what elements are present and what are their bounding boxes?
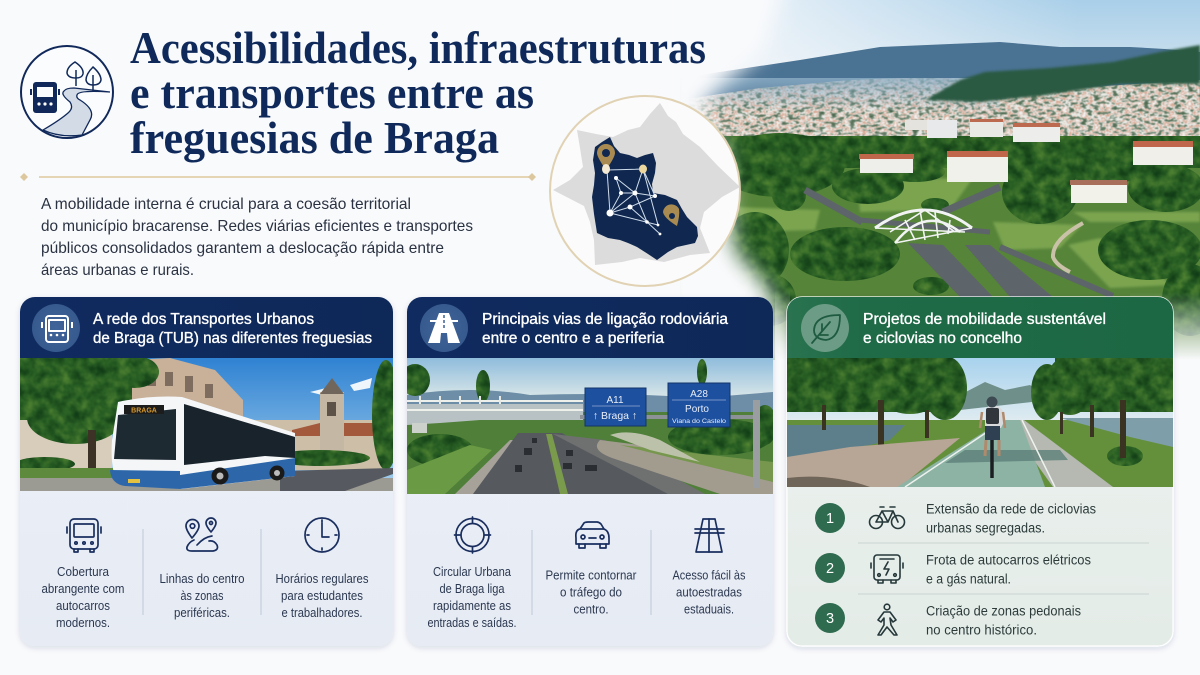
column text 2: o tráfego do [560, 586, 622, 600]
column text 2: Linhas do centro [160, 572, 245, 586]
column text 2: às zonas [180, 589, 224, 603]
hero photo: aerial view of Braga [660, 0, 1200, 370]
column text 1: Circular Urbana [433, 565, 511, 579]
bus in logo [30, 82, 60, 113]
separators [143, 529, 261, 615]
road sign A11: ↑ Braga ↑ [593, 410, 637, 422]
item 3: no centro histórico. [926, 622, 1037, 638]
title: freguesias de Braga [130, 113, 499, 163]
card heading [93, 311, 372, 347]
column text 3: estaduais. [684, 602, 734, 616]
card heading: e ciclovias no concelho [863, 330, 1022, 347]
column text 2 [546, 568, 636, 616]
photo: motorway and signs [400, 358, 777, 494]
column text 1 [42, 565, 124, 630]
lawn patches [737, 178, 1200, 288]
column text 3 [672, 568, 746, 616]
photo: bus in front of historic buildings [15, 356, 400, 491]
item 2: Frota de autocarros elétricos [926, 552, 1091, 568]
column text 2: Permite contornar [546, 568, 636, 582]
item 1 [815, 502, 1096, 536]
item 2 [815, 552, 1091, 586]
intro text: do município bracarense. Redes viárias eficientes e transportes [41, 218, 473, 235]
title [130, 23, 706, 163]
item 1: urbanas segregadas. [926, 520, 1045, 536]
card: TUB network [15, 297, 400, 646]
card: sustainable mobility [787, 297, 1180, 646]
road sign A28: Viana do Castelo [672, 418, 726, 425]
card heading: de Braga (TUB) nas diferentes freguesias [93, 330, 372, 347]
bus [110, 397, 295, 489]
gantry [580, 415, 755, 419]
item 2: 2 [826, 561, 834, 577]
column text 2: periféricas. [174, 606, 230, 620]
item 1: 1 [826, 511, 834, 527]
road sign A28: A28 [690, 389, 708, 400]
item 1: Extensão da rede de ciclovias [926, 502, 1096, 516]
column text 3: para estudantes [281, 589, 363, 603]
lawn base [680, 138, 1200, 360]
column text 1: modernos. [56, 616, 110, 630]
road sign A11: A11 [606, 395, 624, 406]
column text 1: abrangente com [42, 582, 124, 596]
card header [407, 297, 773, 358]
column text 2: centro. [574, 602, 608, 616]
icon: electric bus [871, 555, 903, 583]
hero buildings [859, 119, 1193, 203]
separators [532, 530, 651, 615]
intro text [41, 196, 473, 279]
intro text: A mobilidade interna é crucial para a coesão territorial [41, 196, 411, 213]
column text 1 [428, 565, 516, 630]
column text 2 [160, 572, 245, 620]
column text 1: Cobertura [57, 565, 109, 579]
trees in logo [67, 62, 101, 92]
column text 1: de Braga liga [440, 582, 505, 596]
column text 3 [276, 572, 368, 620]
main carriageways [908, 243, 1053, 297]
road sign A28: Porto [685, 404, 709, 415]
icon: bicycle [870, 507, 904, 528]
intro text: públicos consolidados garantem a deslocação rápida entre [41, 240, 444, 257]
cyclist [980, 396, 1005, 478]
white fades over hero [660, 0, 790, 370]
item 3 [815, 603, 1081, 638]
road sign A11 [585, 388, 646, 426]
gold divider [20, 173, 536, 181]
icon: pedestrian [878, 604, 897, 635]
roads [805, 187, 1113, 296]
title: e transportes entre as [130, 68, 534, 118]
header icon: highway [420, 304, 468, 352]
icon: roundabout [454, 517, 490, 553]
column text 1: autocarros [56, 599, 110, 613]
column text 1: entradas e saídas. [428, 616, 516, 630]
card heading: entre o centro e a periferia [482, 330, 664, 347]
intro text: áreas urbanas e rurais. [41, 262, 194, 279]
card heading [482, 311, 728, 347]
column text 3: Horários regulares [276, 572, 368, 586]
bridge [875, 210, 972, 243]
icon: bus [67, 519, 101, 552]
card heading: Principais vias de ligação rodoviária [482, 311, 728, 328]
card heading: A rede dos Transportes Urbanos [93, 311, 314, 328]
column text 3: autoestradas [676, 586, 742, 600]
title: Acessibilidades, infraestruturas [130, 23, 706, 73]
icon: map pins [186, 518, 218, 551]
icon: car [576, 522, 609, 548]
column text 3: e trabalhadores. [282, 606, 362, 620]
road in logo [43, 88, 110, 136]
tree masses [680, 133, 1200, 336]
circular logo icon: bus, road and trees [21, 46, 113, 138]
card heading: Projetos de mobilidade sustentável [863, 311, 1106, 328]
card header [787, 297, 1173, 358]
outer grey territory [553, 103, 740, 265]
icon: clock [305, 518, 339, 552]
photo: cycle path and cyclist [787, 358, 1173, 487]
item 3: 3 [826, 611, 834, 627]
gold map pins [597, 144, 679, 226]
item 3: Criação de zonas pedonais [926, 604, 1081, 618]
card header [20, 297, 393, 358]
bus: BRAGA [131, 408, 157, 414]
card heading [863, 311, 1106, 347]
column text 1: rapidamente as [433, 599, 511, 613]
column text 3: Acesso fácil às [672, 568, 746, 582]
network lines and nodes [606, 169, 661, 235]
icon: motorway [695, 519, 724, 552]
card: main road links [400, 297, 777, 646]
header icon: bus [32, 304, 80, 352]
road sign A28 [668, 383, 730, 427]
header icon: leaf [801, 304, 849, 352]
navy central parish area [592, 137, 698, 260]
item 2: e a gás natural. [926, 572, 1011, 586]
overpass [407, 404, 583, 425]
circular map of the municipality [550, 96, 740, 286]
